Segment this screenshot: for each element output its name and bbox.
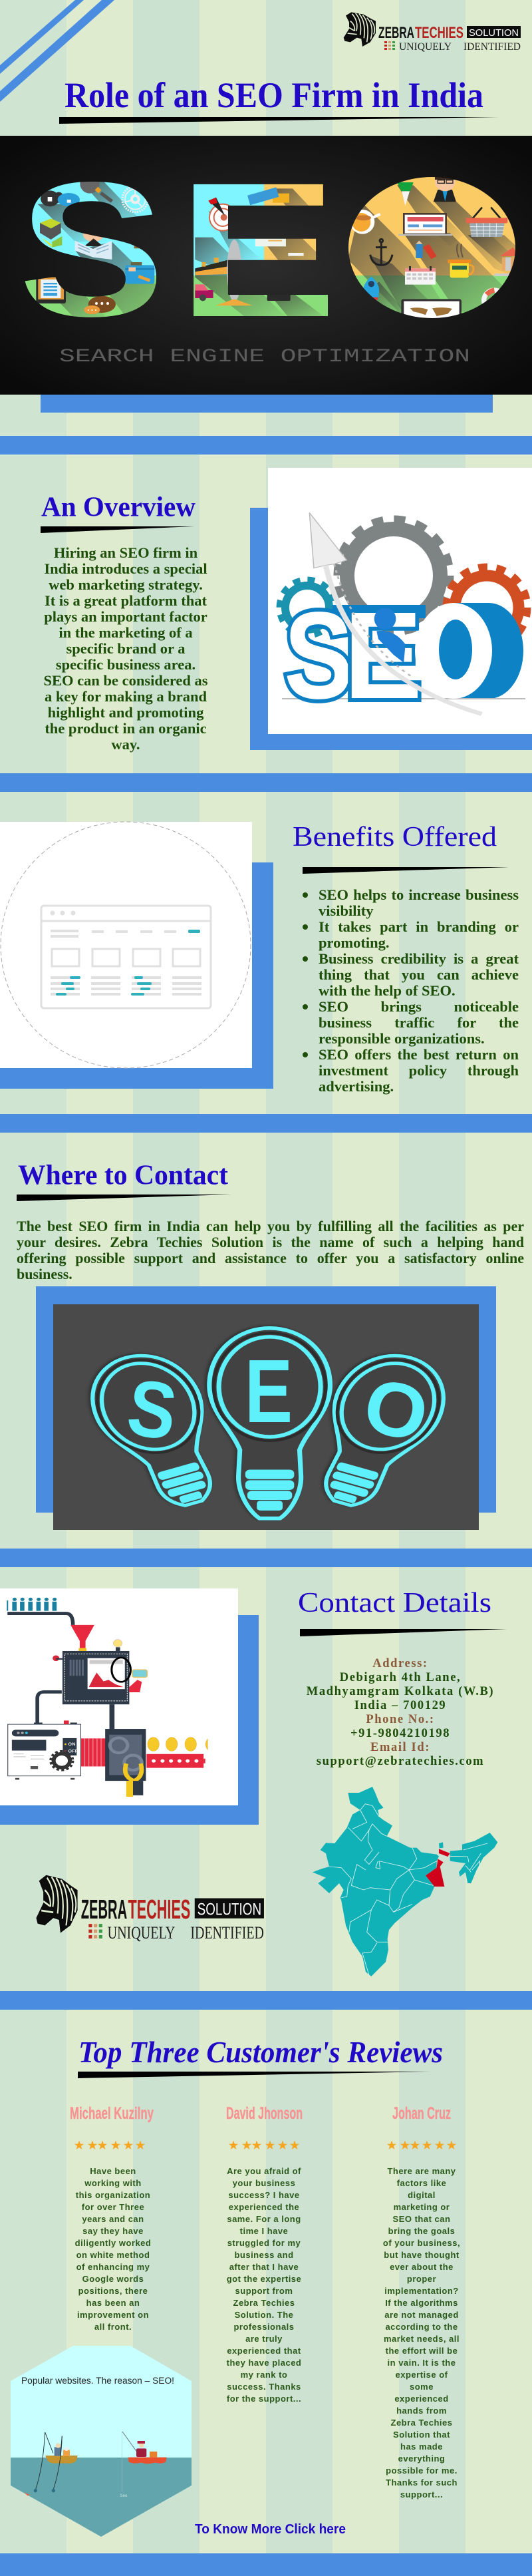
logo: Zebra Techies Solution: UNIQUELY bbox=[399, 41, 452, 53]
text: review three: SEO that can bbox=[393, 2214, 450, 2224]
text: where to contact paragraph: business. bbox=[17, 1266, 72, 1282]
heading: an overview: An Overview bbox=[41, 492, 196, 523]
link: to know more: To Know More Click here bbox=[195, 2522, 346, 2537]
text: benefits list: It takes part in branding or bbox=[319, 918, 519, 935]
hexagon caption: Popular websites. The reason – SEO! bbox=[21, 2375, 174, 2386]
review names: David Jhonson bbox=[226, 2104, 303, 2123]
text: benefits list: visibility bbox=[319, 902, 374, 919]
text: overview paragraph: way. bbox=[111, 736, 140, 753]
panel: popular websites hexagon bbox=[11, 2346, 192, 2537]
text: review one: on white method bbox=[76, 2250, 150, 2260]
icons of letter O bbox=[348, 172, 519, 321]
logo: Zebra Techies Solution: TECHIES bbox=[415, 24, 464, 42]
text: review two: Solution. The bbox=[235, 2310, 293, 2320]
text: review one: positions, there bbox=[78, 2286, 148, 2296]
icon: row of people bbox=[7, 1598, 57, 1611]
text: review three: in vain. It is the bbox=[388, 2358, 456, 2368]
text: review three bbox=[383, 2166, 460, 2499]
text: contact address: Debigarh 4th Lane, bbox=[340, 1671, 461, 1684]
title: Role of an SEO Firm in India bbox=[65, 75, 483, 115]
text: review two: time I have bbox=[240, 2226, 288, 2236]
icon: zebra head bbox=[344, 12, 376, 47]
text: review two: success? I have bbox=[228, 2190, 300, 2200]
text: review three: There are many bbox=[387, 2166, 456, 2176]
logo: Zebra Techies Solution large: SOLUTION bbox=[198, 1900, 261, 1919]
image: SEO light bulbs bbox=[36, 1286, 496, 1530]
text: review three: bring the goals bbox=[388, 2226, 455, 2236]
text: review three: Thanks for such bbox=[386, 2478, 458, 2487]
text: benefits list: Business credibility is a great bbox=[319, 950, 519, 967]
panel: SEO hero image bbox=[0, 136, 532, 395]
text: overview paragraph: specific business area. bbox=[56, 656, 196, 673]
text: contact address: Phone No.: bbox=[366, 1713, 435, 1726]
text: review two: after that I have bbox=[229, 2262, 299, 2272]
text: contact address: Madhyamgram Kolkata (W.B) bbox=[307, 1685, 494, 1698]
text: review two: same. For a long bbox=[227, 2214, 301, 2224]
icon: rocket bbox=[363, 277, 379, 300]
text: review three: expertise of bbox=[395, 2370, 448, 2380]
icon: dashboard console: OFF bbox=[68, 1749, 78, 1753]
text: review two: my rank to bbox=[241, 2370, 287, 2380]
heading: benefits offered: Benefits Offered bbox=[293, 822, 497, 852]
fishing boats illustration bbox=[34, 2432, 167, 2498]
icon: bank bbox=[494, 248, 515, 276]
icon: dart target bbox=[208, 197, 230, 232]
text: review two bbox=[226, 2166, 301, 2404]
red bellows bbox=[81, 1738, 106, 1766]
West Bengal bbox=[426, 1849, 450, 1887]
logo: Zebra Techies Solution large: TECHIES bbox=[128, 1895, 190, 1925]
divider bar bbox=[0, 1114, 532, 1133]
review names: Michael Kuzilny bbox=[70, 2104, 154, 2123]
text: benefits list: with the help of SEO. bbox=[319, 982, 456, 999]
text: review three: some bbox=[410, 2382, 434, 2392]
text: review two: they have placed bbox=[227, 2358, 301, 2368]
text: overview paragraph: web marketing strategy. bbox=[49, 576, 203, 593]
text: contact address: Email Id: bbox=[370, 1741, 430, 1754]
text: contact address: India – 700129 bbox=[354, 1699, 446, 1712]
hook label: Seo bbox=[120, 2494, 128, 2498]
text: overview paragraph: specific brand or a bbox=[66, 640, 185, 657]
text: review three: hands from bbox=[396, 2406, 447, 2416]
text: benefits list: SEO offers the best return on bbox=[319, 1046, 519, 1063]
icon: tablet document bbox=[36, 275, 66, 303]
text: overview paragraph: the product in an organic bbox=[45, 720, 207, 737]
icon: gray gear bbox=[338, 520, 450, 632]
logo: Zebra Techies Solution: IDENTIFIED bbox=[464, 41, 521, 53]
icon: chat bubbles bbox=[84, 296, 116, 314]
text: contact address bbox=[307, 1657, 494, 1768]
Sikkim bbox=[439, 1842, 444, 1848]
text: review one: of enhancing my bbox=[76, 2262, 150, 2272]
icon: center bulb E bbox=[209, 1328, 330, 1519]
text: overview paragraph bbox=[43, 544, 208, 753]
text: review two: got the expertise bbox=[227, 2274, 301, 2284]
main land bbox=[313, 1787, 439, 1976]
icons of letter S and E bbox=[36, 181, 323, 317]
icon: credit cards bbox=[247, 187, 289, 205]
icon: cube bbox=[40, 218, 62, 248]
text: review three: factors like bbox=[397, 2178, 446, 2188]
text: review three: experienced bbox=[394, 2394, 449, 2404]
title underline brush bbox=[59, 117, 499, 124]
text: overview paragraph: It is a great platform that bbox=[45, 592, 207, 609]
blue bar under hero bbox=[41, 395, 493, 413]
state borders bbox=[329, 1804, 487, 1975]
text: overview paragraph: SEO can be considered as bbox=[43, 672, 208, 689]
bulb letters: S bbox=[122, 1363, 182, 1457]
icon: document bbox=[255, 238, 286, 246]
text: contact address: Address: bbox=[372, 1657, 428, 1670]
benefits underline brush bbox=[303, 867, 509, 874]
icon: car bbox=[195, 284, 213, 301]
text: benefits list bbox=[319, 886, 519, 1095]
contact underline brush bbox=[300, 1629, 507, 1636]
text: review three: ever about the bbox=[390, 2262, 454, 2272]
arrow with ladder and blue figure bbox=[309, 512, 481, 714]
text: review two: experienced the bbox=[229, 2202, 299, 2212]
icon: gear box with wrench bbox=[105, 1729, 146, 1797]
text: review three: of your business, bbox=[383, 2238, 460, 2248]
icon: coffee cup bbox=[350, 210, 380, 234]
icon: life ring bbox=[481, 287, 500, 304]
icon: calendar bbox=[405, 266, 436, 285]
text: review two: Are you afraid of bbox=[227, 2166, 301, 2176]
text: benefits list: business traffic for the bbox=[319, 1014, 519, 1031]
icon: aeroplane bbox=[195, 240, 253, 305]
text: overview paragraph: a key for making a brand bbox=[45, 688, 207, 705]
icon: briefcase bbox=[125, 262, 154, 284]
divider bar bbox=[0, 1991, 532, 2010]
icon: anchor bbox=[370, 239, 392, 265]
icon: magnifier bbox=[80, 182, 113, 203]
map: India with West Bengal highlighted bbox=[313, 1787, 497, 1976]
icon: world map monitor bbox=[401, 299, 462, 319]
logo: Zebra Techies Solution: SOLUTION bbox=[469, 27, 519, 39]
decorative diagonal stripes bbox=[0, 0, 114, 102]
text: review three: Solution that bbox=[393, 2430, 450, 2440]
icon: left bulb S bbox=[75, 1344, 243, 1517]
heading: top three customer's reviews: Top Three Customer's Reviews bbox=[78, 2035, 443, 2069]
review names bbox=[70, 2104, 451, 2123]
icon: small gear bbox=[288, 253, 304, 256]
star ratings bbox=[74, 2140, 456, 2149]
text: benefits list: SEO brings noticeable bbox=[319, 998, 519, 1015]
text: benefits list: investment policy through bbox=[319, 1062, 519, 1079]
text: benefits list: SEO helps to increase business bbox=[319, 886, 519, 903]
text: review three: marketing or bbox=[394, 2202, 450, 2212]
bottom bar bbox=[0, 2553, 532, 2576]
text: review three: has made bbox=[400, 2442, 443, 2452]
text: review two: struggled for my bbox=[227, 2238, 301, 2248]
icon: red funnel bbox=[70, 1625, 94, 1651]
text: contact address: +91-9804210198 bbox=[350, 1727, 450, 1740]
icon: yellow boat with fishers bbox=[34, 2432, 78, 2492]
text: review two: for the support... bbox=[227, 2394, 301, 2404]
text: review three: implementation? bbox=[384, 2286, 459, 2296]
text: contact address: support@zebratechies.com bbox=[317, 1755, 484, 1768]
text: overview paragraph: plays an important factor bbox=[44, 608, 207, 625]
icon: user clouds bbox=[41, 190, 80, 206]
text: review one: Google words bbox=[82, 2274, 144, 2284]
text: review two: support from bbox=[235, 2286, 293, 2296]
icon: central machine with screen bbox=[53, 1640, 147, 1704]
heading: contact details: Contact Details bbox=[298, 1588, 491, 1618]
text: review three: market needs, all bbox=[384, 2334, 460, 2344]
text: review two: professionals bbox=[233, 2322, 295, 2332]
text: review three: but have thought bbox=[384, 2250, 460, 2260]
text: where to contact paragraph: offering possible support and assistance to offer you a satisfactory online bbox=[17, 1250, 524, 1266]
text: review one bbox=[75, 2166, 151, 2332]
text: review three: support... bbox=[400, 2489, 443, 2499]
text: where to contact paragraph: The best SEO firm in India can help you by fulfilling all the facilities as per bbox=[17, 1218, 524, 1234]
connecting pipes bbox=[37, 1692, 112, 1730]
text: review two: are truly bbox=[245, 2334, 283, 2344]
text: review one: diligently worked bbox=[75, 2238, 151, 2248]
text: benefits list: promoting. bbox=[319, 934, 389, 951]
text: review three: If the algorithms bbox=[385, 2298, 458, 2308]
text: review one: say they have bbox=[82, 2226, 144, 2236]
bulb letters: E bbox=[245, 1340, 293, 1441]
red conveyor chain bbox=[146, 1754, 205, 1768]
text: review three: Zebra Techies bbox=[391, 2418, 452, 2428]
text: review two: experienced that bbox=[227, 2346, 301, 2356]
text: review one: years and can bbox=[82, 2214, 144, 2224]
icon: laptop bbox=[398, 213, 452, 236]
icon: dashboard console bbox=[8, 1720, 80, 1779]
text: review three: everything bbox=[398, 2454, 445, 2464]
text: where to contact paragraph bbox=[17, 1218, 524, 1282]
image: SEO gears and 3D letters bbox=[250, 468, 532, 750]
text: review three: digital bbox=[408, 2190, 436, 2200]
text: review two: business and bbox=[234, 2250, 294, 2260]
bulb letters bbox=[122, 1340, 437, 1459]
text: overview paragraph: highlight and promoting bbox=[48, 704, 203, 721]
logo: Zebra Techies Solution large bbox=[36, 1875, 264, 1943]
heading: where to contact: Where to Contact bbox=[18, 1161, 228, 1191]
bulb letters: O bbox=[356, 1360, 437, 1459]
review names: Johan Cruz bbox=[392, 2104, 451, 2123]
icon: teal gear bbox=[279, 580, 335, 636]
logo: Zebra Techies Solution large: IDENTIFIED bbox=[190, 1924, 264, 1943]
icon: right bulb O bbox=[293, 1344, 461, 1517]
image: website wireframe panel bbox=[0, 822, 273, 1089]
text: benefits list: thing that you can achieve bbox=[319, 966, 519, 983]
text: review one: Have been bbox=[90, 2166, 136, 2176]
divider bar bbox=[0, 436, 532, 455]
text: review one: has been an bbox=[86, 2298, 140, 2308]
where to contact underline brush bbox=[17, 1195, 231, 1201]
logo: Zebra Techies Solution large: ZEBRA bbox=[81, 1895, 127, 1925]
north east states bbox=[450, 1833, 497, 1883]
text: review one: this organization bbox=[76, 2190, 150, 2200]
logo: Zebra Techies Solution bbox=[344, 12, 521, 53]
icon: coins bbox=[148, 1738, 207, 1751]
icon: orange gear bbox=[447, 568, 527, 647]
text: review one: working with bbox=[84, 2178, 142, 2188]
icon: businessman bbox=[434, 177, 456, 202]
text: review three: possible for me. bbox=[386, 2466, 458, 2476]
hero letters with flat icons bbox=[25, 177, 515, 318]
list bullets bbox=[303, 892, 308, 1057]
text: review two: Zebra Techies bbox=[233, 2298, 295, 2308]
text: review three: according to the bbox=[385, 2322, 458, 2332]
divider bar bbox=[0, 773, 532, 792]
icon: dashboard console: ON bbox=[68, 1743, 75, 1747]
icon: steam mug bbox=[448, 244, 473, 277]
text: overview paragraph: Hiring an SEO firm in bbox=[54, 544, 198, 561]
3D SEO letters bbox=[282, 587, 525, 725]
icon: man with newspaper bbox=[74, 233, 140, 260]
icon: zebra head bbox=[36, 1875, 78, 1933]
logo: Zebra Techies Solution: ZEBRA bbox=[378, 24, 414, 42]
text: overview paragraph: in the marketing of a bbox=[59, 624, 193, 641]
text: review three: are not managed bbox=[384, 2310, 459, 2320]
logo: Zebra Techies Solution large: UNIQUELY bbox=[108, 1924, 175, 1943]
icon: camera bbox=[267, 295, 291, 301]
small lure bbox=[25, 2493, 30, 2496]
3D SEO letters: E bbox=[344, 587, 422, 725]
pipe to funnel bbox=[7, 1614, 73, 1625]
text: review two: success. Thanks bbox=[227, 2382, 301, 2392]
caption: search engine optimization: SEARCH ENGINE OPTIMIZATION bbox=[59, 347, 470, 367]
icon: red boat with fisher bbox=[122, 2432, 167, 2492]
water bbox=[11, 2458, 192, 2537]
text: review three: proper bbox=[407, 2274, 436, 2284]
text: benefits list: advertising. bbox=[319, 1078, 394, 1095]
icon: pin bbox=[397, 182, 414, 206]
text: review one: all front. bbox=[94, 2322, 132, 2332]
text: review one: for over Three bbox=[82, 2202, 144, 2212]
text: review one: improvement on bbox=[77, 2310, 149, 2320]
divider bar bbox=[0, 1549, 532, 1567]
overview underline brush bbox=[41, 526, 194, 533]
reviews underline brush bbox=[78, 2072, 431, 2078]
text: where to contact paragraph: your desires. Zebra Techies Solution is the name of such a helping hand bbox=[17, 1234, 524, 1250]
image: SEO machine panel bbox=[0, 1588, 259, 1825]
text: overview paragraph: India introduces a special bbox=[44, 560, 207, 577]
3D SEO letters: S bbox=[284, 587, 353, 725]
text: benefits list: responsible organizations. bbox=[319, 1030, 485, 1047]
icon: gear bbox=[122, 186, 148, 212]
icon: basket bbox=[466, 208, 507, 237]
text: review three: the effort will be bbox=[386, 2346, 458, 2356]
text: review two: your business bbox=[233, 2178, 295, 2188]
icon: browser window bbox=[41, 906, 211, 1008]
icon: pencils bbox=[416, 241, 437, 259]
